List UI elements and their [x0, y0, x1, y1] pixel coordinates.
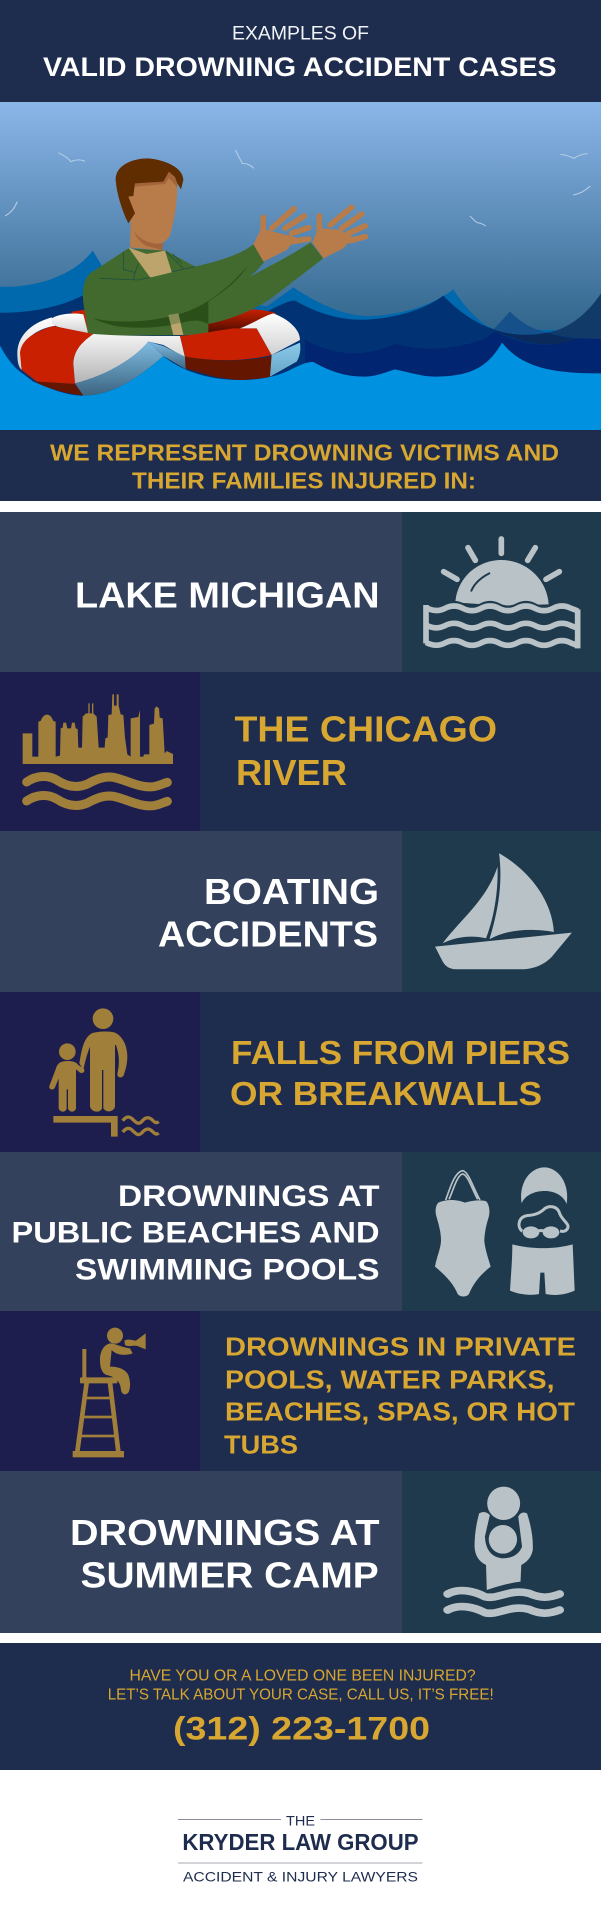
hand 1	[253, 209, 309, 262]
waves behind the figure	[0, 251, 601, 430]
label: DROWNINGS IN PRIVATE	[225, 1332, 576, 1362]
phone number: (312) 223-1700	[173, 1710, 430, 1746]
icon: Chicago skyline and river	[23, 694, 173, 806]
icon: sun over water	[426, 539, 578, 648]
icon: lifeguard on chair with megaphone	[73, 1328, 146, 1457]
subheading text: WE REPRESENT DROWNING VICTIMS AND	[50, 440, 559, 466]
label: DROWNINGS AT	[118, 1180, 380, 1213]
panel: Private pools, water parks, beaches, spas, hot tubs: BEACHES, SPAS, OR HOT	[225, 1397, 575, 1427]
panel: Boating Accidents: ACCIDENTS	[158, 914, 378, 955]
jacket seams	[99, 252, 195, 280]
panel: Falls from piers or breakwalls: OR BREAKWALLS	[230, 1076, 542, 1113]
neck and head	[128, 170, 177, 251]
life ring: front	[20, 313, 300, 396]
logo: The Kryder Law Group: THE	[286, 1813, 315, 1829]
header kicker: EXAMPLES OF	[232, 22, 369, 44]
panel: Boating Accidents	[0, 831, 601, 992]
logo: The Kryder Law Group: KRYDER LAW GROUP	[182, 1829, 419, 1855]
panel: Public beaches and swimming pools: SWIMMING POOLS	[75, 1253, 380, 1286]
back arm	[208, 242, 323, 324]
label: THE CHICAGO	[234, 709, 497, 750]
panel: Lake Michigan	[0, 512, 601, 672]
label: BOATING	[204, 871, 379, 912]
jacket body	[83, 248, 208, 336]
icon: adult and child on pier	[49, 1008, 159, 1137]
logo: The Kryder Law Group: ACCIDENT & INJURY LAWYERS	[183, 1869, 418, 1885]
seagulls	[5, 150, 590, 226]
hair	[116, 158, 183, 223]
illustration: man in life ring among waves	[0, 102, 601, 430]
panel: Private pools, water parks, beaches, spas, hot tubs: POOLS, WATER PARKS,	[225, 1364, 555, 1394]
life ring: back	[17, 309, 277, 370]
panel: Summer camp	[0, 1471, 601, 1633]
panel: Public beaches and swimming pools	[0, 1152, 601, 1311]
hand 2	[312, 207, 365, 258]
title: VALID DROWNING ACCIDENT CASES	[43, 52, 556, 82]
icon: sailboat	[435, 853, 572, 969]
subheading band	[0, 430, 601, 501]
call to action band: LET’S TALK ABOUT YOUR CASE, CALL US, IT’S FREE!	[108, 1687, 494, 1704]
panel: The Chicago River	[0, 672, 601, 831]
label: FALLS FROM PIERS	[231, 1035, 570, 1072]
label: DROWNINGS AT	[70, 1512, 380, 1553]
panel: Public beaches and swimming pools: PUBLIC BEACHES AND	[12, 1217, 380, 1250]
label: LAKE MICHIGAN	[75, 575, 380, 616]
panel: Summer camp: SUMMER CAMP	[80, 1555, 379, 1596]
logo: The Kryder Law Group	[178, 1813, 422, 1885]
sleeve	[85, 244, 264, 320]
panel: Private pools, water parks, beaches, spas, hot tubs: TUBS	[224, 1429, 298, 1459]
icon: adult holding child in water	[448, 1487, 560, 1613]
subheading band: THEIR FAMILIES INJURED IN:	[132, 468, 476, 494]
shirt strip	[168, 313, 183, 335]
panel: Falls from piers or breakwalls	[0, 992, 601, 1152]
panel: Private pools, water parks, beaches, spas, hot tubs	[0, 1311, 601, 1471]
icon: swimsuit, cap, goggles and trunks	[435, 1167, 575, 1296]
header band	[0, 0, 601, 102]
call to action text: HAVE YOU OR A LOVED ONE BEEN INJURED?	[130, 1667, 476, 1684]
jacket shading	[93, 265, 248, 328]
front water	[0, 343, 601, 430]
panel: The Chicago River: RIVER	[236, 752, 347, 793]
shirt	[128, 247, 173, 277]
call to action band	[0, 1643, 601, 1770]
man	[83, 158, 365, 336]
